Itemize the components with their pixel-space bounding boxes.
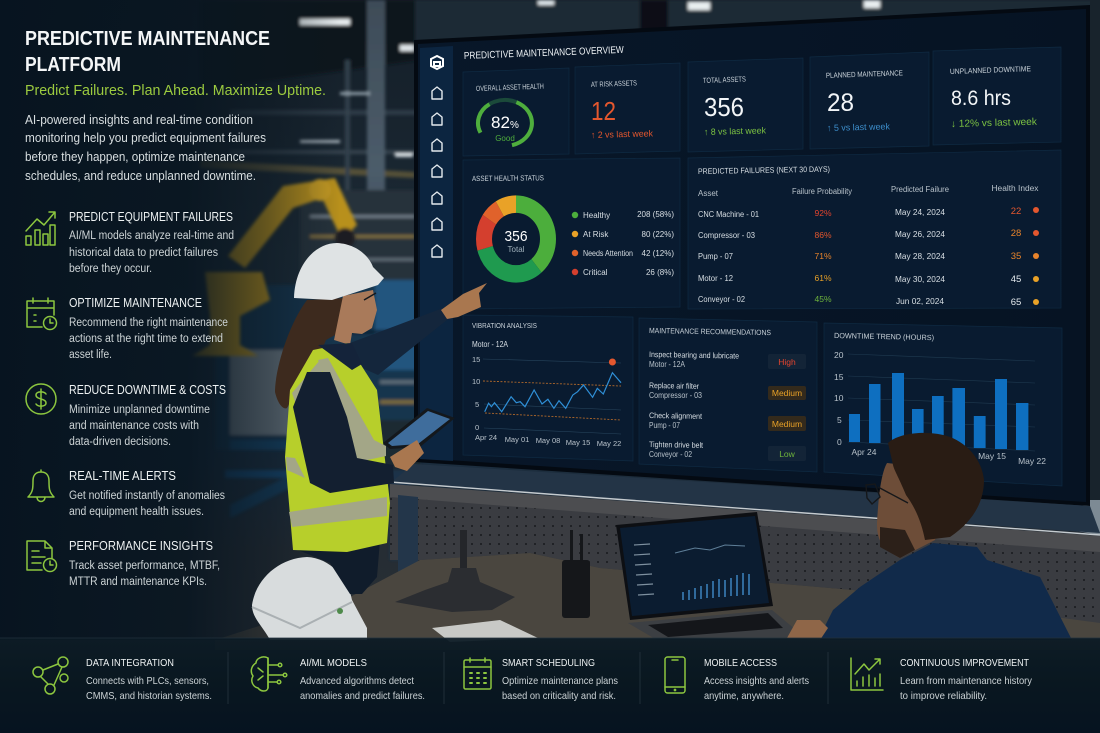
card: total assets (688, 58, 803, 152)
card: planned maintenance: 28 (827, 89, 854, 117)
bottom band (0, 638, 1100, 733)
icon: home (432, 87, 442, 99)
icon: assets (432, 113, 442, 125)
sidebar navigation (420, 46, 453, 461)
icon: growth chart (26, 212, 55, 245)
feature: performance insights: PERFORMANCE INSIGHTS (69, 539, 213, 553)
line chart: 15 (472, 355, 480, 364)
table rows: Conveyor - 02 (698, 295, 746, 304)
recommendation: check alignment: Pump - 07 (649, 421, 680, 430)
icon: logo (431, 56, 443, 69)
recommendation: replace air filter (649, 381, 806, 400)
left dark overlay (0, 0, 340, 640)
feature: optimize maintenance: actions at the right time to extend (69, 333, 223, 345)
table rows: Pump - 07 (698, 252, 734, 261)
beard (880, 527, 915, 558)
feature: optimize maintenance: Recommend the right maintenance (69, 317, 228, 329)
table header: Asset (698, 189, 719, 198)
recommendation: replace air filter: Compressor - 03 (649, 391, 702, 400)
seated engineer (787, 433, 1072, 640)
feature: ai/ml models: anomalies and predict failures. (300, 690, 425, 702)
hard hat (294, 243, 384, 300)
recommendation: inspect bearing: Motor - 12A (649, 360, 686, 369)
card: planned maintenance: PLANNED MAINTENANCE (826, 68, 903, 80)
feature: data integration (33, 657, 212, 702)
line chart: May 01 (505, 435, 529, 444)
upper right warehouse strip (415, 0, 1100, 43)
panel: downtime trend: DOWNTIME TREND (HOURS) (834, 331, 935, 342)
bar chart: Apr 24 (851, 447, 877, 457)
bar chart: 20 (834, 350, 844, 360)
table rows (698, 206, 1039, 308)
subtitle: Predict Failures. Plan Ahead. Maximize Uptime. (25, 82, 326, 99)
yellow robot arm (192, 178, 357, 356)
panel: downtime trend (824, 323, 1062, 486)
lower hand (390, 440, 424, 471)
gauge: 82 percent: 82 (491, 113, 510, 132)
title: PLATFORM (25, 54, 121, 76)
panel: maintenance recommendations (639, 318, 817, 472)
feature: ai/ml models: Advanced algorithms detect (300, 675, 414, 687)
intro paragraph: before they happen, optimize maintenance (25, 150, 245, 164)
bar chart: 0 (837, 437, 842, 447)
donut chart (484, 204, 548, 274)
gauge: 82 percent: % (510, 120, 519, 131)
recommendation: tighten drive belt: Conveyor - 02 (649, 450, 692, 459)
title (25, 28, 270, 76)
feature: optimize maintenance: asset life. (69, 349, 112, 361)
ponytail (275, 298, 346, 408)
hair (888, 433, 984, 540)
reflective strips (286, 358, 387, 527)
icon: brain (251, 657, 287, 691)
feature: real-time alerts (28, 469, 225, 518)
feature: data integration: CMMS, and historian systems. (86, 690, 212, 702)
table header: Failure Probability (792, 187, 852, 196)
line chart: 0 (475, 423, 479, 432)
feature: predict equipment failures: AI/ML models analyze real-time and (69, 230, 234, 242)
feature: continuous improvement: to improve reliability. (900, 690, 987, 702)
recommendation: inspect bearing: Inspect bearing and lubricate (649, 350, 740, 361)
spare hard hat (252, 557, 367, 640)
line chart: May 22 (597, 439, 621, 448)
recommendation: check alignment (649, 411, 806, 431)
icon: report clock (27, 541, 56, 572)
feature: data integration: DATA INTEGRATION (86, 657, 174, 669)
panel: asset health status: ASSET HEALTH STATUS (472, 173, 544, 183)
card: unplanned downtime: UNPLANNED DOWNTIME (950, 64, 1031, 76)
card: unplanned downtime (933, 47, 1061, 145)
icon: network nodes (33, 657, 68, 694)
feature: optimize maintenance: OPTIMIZE MAINTENANCE (69, 296, 202, 310)
card: total assets: 356 (704, 92, 744, 122)
feature: mobile access: anytime, anywhere. (704, 690, 784, 702)
icon: improvement chart (851, 658, 883, 690)
bar chart (834, 350, 1046, 466)
donut chart: 356 (504, 228, 528, 245)
feature: mobile access: Access insights and alerts (704, 675, 809, 687)
icon: reports (432, 192, 442, 204)
legend: asset health (572, 210, 674, 277)
handheld radio (562, 530, 590, 618)
table rows: 22 (1011, 206, 1021, 217)
table rows: 45% (814, 294, 832, 304)
table rows: 92% (814, 208, 832, 218)
feature: data integration: Connects with PLCs, sensors, (86, 675, 209, 687)
feature: ai/ml models: AI/ML MODELS (300, 657, 367, 669)
card: at risk assets: ↑ 2 vs last week (591, 128, 654, 140)
feature: real-time alerts: and equipment health issues. (69, 506, 204, 518)
legend: asset health: Critical (583, 268, 608, 277)
feature: smart scheduling: SMART SCHEDULING (502, 657, 595, 669)
bar chart: May 15 (978, 451, 1006, 461)
recommendation: inspect bearing: High (778, 357, 796, 367)
panel: asset health status (463, 158, 680, 309)
work table (215, 553, 1100, 650)
recommendation: replace air filter: Medium (772, 388, 802, 398)
intro paragraph: AI-powered insights and real-time condition (25, 113, 253, 127)
gauge: 82 percent (478, 100, 532, 145)
table rows: 45 (1011, 274, 1021, 285)
paper on table (432, 620, 538, 642)
card: planned maintenance (810, 52, 929, 149)
card: overall asset health (463, 68, 569, 156)
icon: bell (28, 470, 54, 502)
panel: vibration analysis: VIBRATION ANALYSIS (472, 321, 537, 330)
body and sleeve (293, 372, 394, 493)
feature: ai/ml models (251, 657, 425, 702)
legend: asset health: Healthy (583, 211, 610, 220)
bar chart: 10 (834, 393, 844, 403)
feature: performance insights: MTTR and maintenance KPIs. (69, 576, 207, 588)
legs (293, 540, 380, 594)
legend: asset health: 42 (12%) (642, 249, 674, 258)
feature: performance insights (27, 539, 220, 588)
table header (698, 184, 1038, 198)
table rows: May 28, 2024 (895, 252, 946, 261)
monitor ledge (390, 464, 1100, 625)
feature: reduce downtime and costs: Minimize unplanned downtime (69, 404, 210, 416)
table rows: 28 (1011, 228, 1021, 239)
recommendation: check alignment: Check alignment (649, 411, 703, 421)
legend: asset health: At Risk (583, 230, 609, 239)
wall monitor (414, 5, 1090, 506)
icon: insights (432, 218, 442, 230)
feature: predict equipment failures: before they occur. (69, 263, 152, 275)
raised arm (350, 308, 447, 375)
table rows: 35 (1011, 251, 1021, 262)
panel: vibration analysis: Motor - 12A (472, 340, 509, 349)
feature: reduce downtime and costs: REDUCE DOWNTIME & COSTS (69, 383, 226, 397)
card: total assets: TOTAL ASSETS (703, 75, 746, 85)
panel: predicted failures table: PREDICTED FAILURES (NEXT 30 DAYS) (698, 165, 830, 176)
face (877, 463, 960, 558)
line chart: May 15 (566, 438, 590, 447)
face (334, 290, 377, 345)
icon: alerts (432, 139, 442, 151)
intro paragraph: monitoring help you predict equipment failures (25, 131, 266, 145)
table rows: 61% (814, 273, 832, 283)
feature: predict equipment failures: historical data to predict failures (69, 247, 218, 259)
line chart: Apr 24 (475, 433, 497, 442)
table rows: Compressor - 03 (698, 231, 756, 240)
feature: performance insights: Track asset performance, MTBF, (69, 560, 220, 572)
bar chart: May 22 (1018, 456, 1046, 466)
legend: asset health: Needs Attention (583, 249, 633, 258)
shirt (818, 543, 1072, 640)
recommendation: check alignment: Medium (772, 419, 802, 429)
intro paragraph: schedules, and reduce unplanned downtime. (25, 169, 256, 183)
card: at risk assets: AT RISK ASSETS (591, 78, 637, 89)
table rows: Jun 02, 2024 (896, 297, 945, 306)
recommendation: tighten drive belt: Low (779, 449, 796, 459)
icon: calendar grid (464, 658, 491, 689)
panel: vibration analysis (463, 315, 633, 461)
recommendation: tighten drive belt (649, 440, 806, 461)
panel: predicted failures table (688, 150, 1061, 309)
legend: asset health: 26 (8%) (646, 268, 674, 277)
feature: continuous improvement: Learn from maintenance history (900, 675, 1033, 687)
table rows: May 30, 2024 (895, 275, 946, 284)
line chart: May 08 (536, 436, 560, 445)
feature: smart scheduling: based on criticality and risk. (502, 690, 616, 702)
table rows: 71% (814, 251, 832, 261)
line chart: 5 (475, 400, 479, 409)
feature: continuous improvement: CONTINUOUS IMPROVEMENT (900, 657, 1029, 669)
intro paragraph (25, 113, 266, 183)
feature: predict equipment failures (26, 210, 234, 275)
feature: mobile access (665, 657, 809, 702)
bar chart: 15 (834, 372, 844, 382)
table rows: Motor - 12 (698, 274, 734, 283)
table rows: CNC Machine - 01 (698, 210, 759, 219)
mechanical part on table (395, 530, 515, 612)
hand pointing (441, 283, 487, 319)
panel: maintenance recommendations: MAINTENANCE RECOMMENDATIONS (649, 326, 771, 337)
icon: dollar coin (26, 384, 56, 414)
legend: asset health: 80 (22%) (642, 230, 674, 239)
hand on keyboard (787, 620, 828, 640)
collar (318, 343, 362, 370)
worker with tablet (275, 243, 487, 594)
recommendation: tighten drive belt: Tighten drive belt (649, 440, 704, 450)
card: at risk assets: 12 (591, 96, 616, 126)
dashboard heading: PREDICTIVE MAINTENANCE OVERVIEW (464, 45, 624, 62)
feature: reduce downtime and costs (26, 383, 226, 448)
legend: asset health: 208 (58%) (637, 210, 674, 219)
line chart (472, 355, 621, 448)
feature: real-time alerts: REAL-TIME ALERTS (69, 469, 176, 483)
feature: real-time alerts: Get notified instantly of anomalies (69, 490, 225, 502)
icon: smartphone (665, 657, 685, 693)
icon: calendar clock (27, 298, 56, 330)
feature: predict equipment failures: PREDICT EQUIPMENT FAILURES (69, 210, 233, 224)
bar chart: 5 (837, 415, 842, 425)
feature: smart scheduling: Optimize maintenance plans (502, 675, 618, 687)
glasses (866, 484, 908, 504)
card: unplanned downtime: 8.6 hrs (951, 87, 1011, 110)
feature: reduce downtime and costs: data-driven decisions. (69, 436, 171, 448)
card: planned maintenance: ↑ 5 vs last week (827, 121, 891, 133)
card: overall asset health: OVERALL ASSET HEALTH (476, 82, 544, 93)
table header: Health Index (992, 184, 1038, 193)
table rows: 86% (814, 230, 832, 240)
feature: continuous improvement (851, 657, 1033, 702)
recommendation: replace air filter: Replace air filter (649, 381, 699, 391)
card: at risk assets (575, 63, 680, 154)
icon: schedule (432, 165, 442, 177)
recommendation: inspect bearing (649, 350, 806, 369)
donut chart: Total (508, 245, 525, 254)
card: total assets: ↑ 8 vs last week (704, 125, 767, 137)
table rows: May 26, 2024 (895, 230, 946, 239)
feature: reduce downtime and costs: and maintenance costs with (69, 420, 199, 432)
line chart: 10 (472, 377, 480, 386)
table rows: 65 (1011, 297, 1021, 308)
feature: optimize maintenance (27, 296, 228, 361)
table header: Predicted Failure (891, 185, 950, 194)
table rows: May 24, 2024 (895, 208, 946, 217)
gauge: 82 percent: Good (495, 134, 515, 143)
tablet (383, 408, 455, 449)
feature: smart scheduling (464, 657, 618, 702)
icon: settings (432, 245, 442, 257)
card: unplanned downtime: ↓ 12% vs last week (951, 117, 1038, 130)
feature: mobile access: MOBILE ACCESS (704, 657, 777, 669)
title: PREDICTIVE MAINTENANCE (25, 28, 270, 50)
laptop (616, 512, 796, 640)
hi-vis vest (285, 343, 390, 552)
